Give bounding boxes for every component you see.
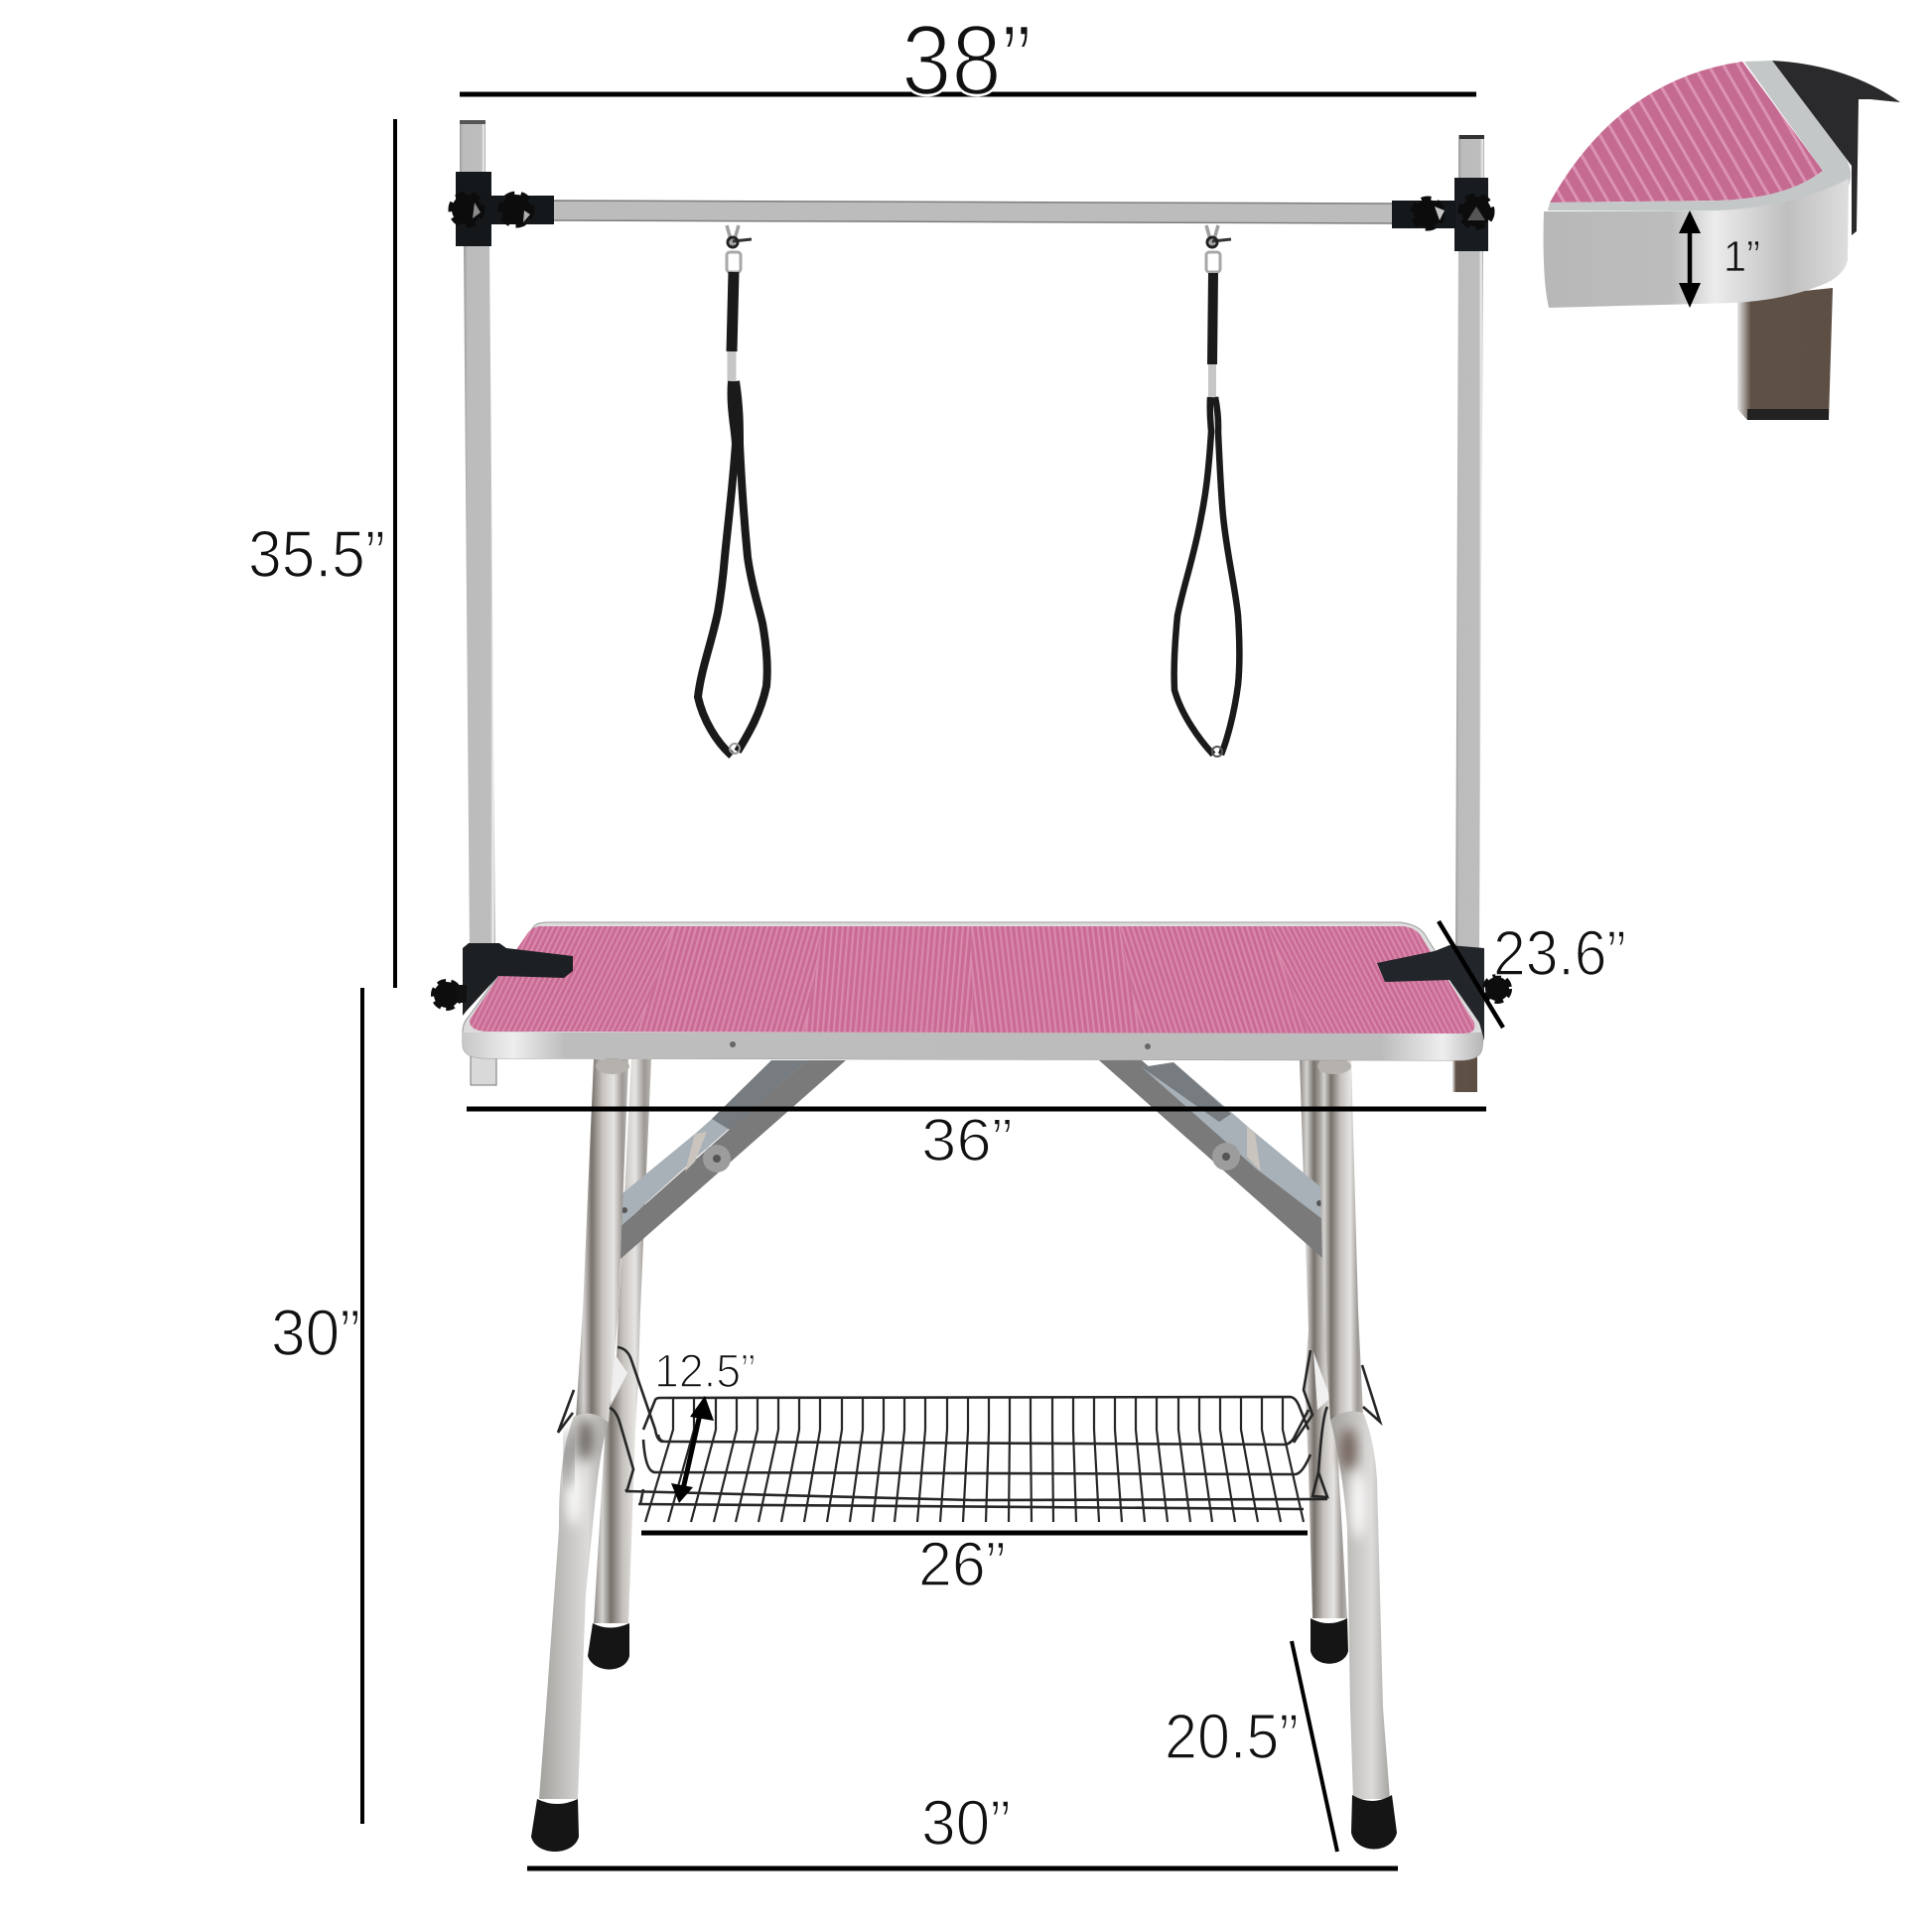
knob	[452, 195, 482, 224]
knob	[1414, 200, 1445, 227]
right folding brace	[1099, 1060, 1323, 1259]
label: 30 in height: 30”	[271, 1296, 360, 1369]
label: 12.5 in: 12.5”	[654, 1344, 756, 1397]
inset arrow	[1679, 210, 1701, 308]
line: 30 in table height	[360, 988, 364, 1824]
left leash	[698, 225, 767, 756]
top horizontal bar	[552, 201, 1394, 223]
left vertical post	[460, 120, 495, 953]
left post lower stub	[471, 1052, 496, 1085]
front right leg	[1317, 1058, 1390, 1799]
basket rails	[625, 1397, 1327, 1509]
table frame	[463, 922, 1483, 1060]
left table clamp	[434, 943, 573, 1016]
back right rubber foot	[1311, 1618, 1348, 1664]
knob	[501, 195, 531, 224]
label: 26 in: 26”	[918, 1530, 1006, 1599]
knob	[434, 982, 467, 1008]
label: 36 in: 36”	[921, 1107, 1013, 1173]
line: 23.6 in table depth	[1439, 921, 1503, 1028]
label: 20.5 in: 20.5”	[1165, 1701, 1299, 1772]
wire basket	[558, 1347, 1380, 1522]
front left leg	[539, 1058, 629, 1799]
knob	[1461, 197, 1491, 226]
inset metal front band	[1544, 179, 1849, 308]
pink table mat	[470, 926, 1475, 1034]
label: 38 in: 38”	[901, 5, 1032, 116]
line: 35.5 in arm height	[393, 119, 397, 988]
right leash	[1174, 225, 1239, 757]
line: 26 in basket width	[641, 1531, 1308, 1535]
left folding brace	[619, 1060, 846, 1259]
back right leg	[1300, 1059, 1347, 1618]
basket wires	[645, 1398, 1304, 1522]
label: 30 in base: 30”	[921, 1787, 1011, 1859]
basket hooks	[558, 1347, 1380, 1497]
right vertical post	[1455, 135, 1484, 953]
inset black clamp	[1772, 61, 1900, 235]
arrow: 12.5 in basket depth	[671, 1396, 714, 1503]
front left rubber foot	[531, 1799, 579, 1852]
line: 38 in top width	[460, 91, 1476, 97]
left top clamp	[452, 172, 554, 246]
knob	[1485, 977, 1509, 1001]
right post lower stub	[1452, 1052, 1477, 1092]
label: 35.5 in: 35.5”	[248, 517, 385, 592]
line: 20.5 in base depth	[1292, 1641, 1337, 1852]
inset label: 1 in: 1”	[1724, 232, 1760, 281]
right table clamp	[1377, 945, 1509, 1040]
right top clamp	[1392, 178, 1491, 251]
label: 23.6 in: 23.6”	[1493, 917, 1626, 989]
front right rubber foot	[1351, 1795, 1397, 1849]
back left leg	[594, 1059, 651, 1623]
dimension lines	[362, 94, 1503, 1868]
line: 30 in base width	[527, 1866, 1398, 1870]
back left rubber foot	[588, 1623, 629, 1670]
line: 36 in table width	[467, 1106, 1486, 1112]
inset leg stub	[1737, 288, 1833, 420]
inset pink mat	[1550, 62, 1823, 203]
inset: table edge detail	[1544, 61, 1900, 420]
inset metal top strip	[1548, 61, 1851, 210]
